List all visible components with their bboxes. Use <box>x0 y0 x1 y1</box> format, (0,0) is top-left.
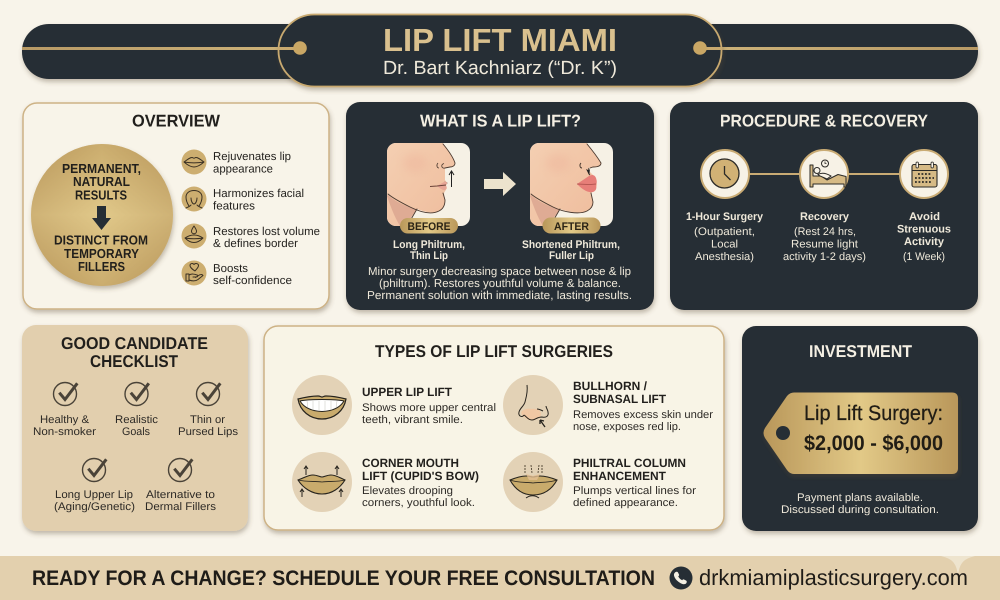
type: bullhorn lift: SUBNASAL LIFT <box>573 392 667 406</box>
type: philtral column <box>503 452 696 512</box>
panel: types of surgeries <box>264 326 724 530</box>
benefit: restores: & defines border <box>213 238 298 250</box>
price tag: Lip Lift Surgery: <box>804 402 943 425</box>
panel: overview <box>23 103 329 309</box>
before caption <box>393 239 465 262</box>
panel: candidate checklist <box>22 325 248 531</box>
type: philtral column: defined appearance. <box>573 497 678 509</box>
payment note: Discussed during consultation. <box>781 504 939 516</box>
description: Minor surgery decreasing space between nose & lip <box>368 266 631 278</box>
step: recovery: Resume light <box>791 238 858 250</box>
type: bullhorn lift <box>503 375 713 435</box>
types heading: TYPES OF LIP LIFT SURGERIES <box>375 342 613 361</box>
after caption: Fuller Lip <box>549 250 594 262</box>
type: philtral column: ENHANCEMENT <box>573 469 667 483</box>
before badge: BEFORE <box>408 221 450 233</box>
type: corner mouth lift: LIFT (CUPID'S BOW) <box>362 469 479 483</box>
type: bullhorn lift: nose, exposes red lip. <box>573 421 681 433</box>
check: filler alternative <box>145 458 217 513</box>
check: healthy <box>33 382 96 438</box>
step: surgery: 1-Hour Surgery <box>686 211 764 223</box>
step: avoid activity: (1 Week) <box>903 251 945 263</box>
what heading: WHAT IS A LIP LIFT? <box>420 112 581 130</box>
header banner <box>22 14 978 86</box>
gold seal: RESULTS <box>75 188 127 202</box>
check: long upper lip <box>54 458 135 513</box>
checklist heading <box>61 334 208 371</box>
procedure heading: PROCEDURE & RECOVERY <box>720 112 929 130</box>
checklist heading: GOOD CANDIDATE <box>61 334 208 353</box>
gold seal: FILLERS <box>78 259 125 274</box>
overview heading: OVERVIEW <box>132 112 221 130</box>
benefit: confidence: Boosts <box>213 263 248 275</box>
type: bullhorn lift: BULLHORN / <box>573 379 648 393</box>
check: realistic: Realistic <box>115 414 159 426</box>
check: thin lips: Pursed Lips <box>178 426 239 438</box>
check: healthy: Healthy & <box>40 414 90 426</box>
benefit: rejuvenates <box>182 150 291 176</box>
icon: bed <box>800 150 848 198</box>
step: recovery: activity 1-2 days) <box>783 251 866 263</box>
type: upper lip lift: Shows more upper central <box>362 402 496 414</box>
footer call to action <box>0 537 1000 600</box>
sparkle <box>941 537 975 575</box>
benefit: harmonizes: features <box>213 200 255 212</box>
panel: what is a lip lift <box>346 102 654 310</box>
check: filler alternative: Alternative to <box>146 489 215 501</box>
after badge <box>542 218 600 234</box>
check: healthy: Non-smoker <box>33 426 96 438</box>
panel: procedure and recovery <box>670 102 978 310</box>
type: corner mouth lift: corners, youthful look. <box>362 497 475 509</box>
payment note: Payment plans available. <box>797 492 923 504</box>
check: long upper lip: (Aging/Genetic) <box>54 501 135 513</box>
step: surgery: (Outpatient, <box>694 226 755 238</box>
before illustration <box>387 143 470 226</box>
benefit: confidence: self-confidence <box>213 275 292 287</box>
subtitle: Dr. Bart Kachniarz (“Dr. K”) <box>383 58 617 79</box>
step: avoid activity: Strenuous <box>897 224 951 236</box>
benefit: confidence <box>182 260 292 287</box>
step: surgery <box>686 211 764 263</box>
description: Permanent solution with immediate, lasting results. <box>367 290 632 302</box>
check: filler alternative: Dermal Fillers <box>145 501 217 513</box>
step: recovery: Recovery <box>800 211 850 223</box>
step: avoid activity <box>897 211 951 263</box>
gold seal: DISTINCT FROM <box>54 232 148 248</box>
benefit: rejuvenates: Rejuvenates lip <box>213 151 291 163</box>
type: upper lip lift: UPPER LIP LIFT <box>362 385 453 399</box>
icon: calendar <box>900 150 948 198</box>
description <box>367 266 632 302</box>
before caption: Thin Lip <box>410 250 448 262</box>
before caption: Long Philtrum, <box>393 239 465 251</box>
title: LIP LIFT MIAMI <box>383 22 617 58</box>
check: long upper lip: Long Upper Lip <box>55 489 133 501</box>
gold seal: TEMPORARY <box>64 246 139 261</box>
after caption <box>522 239 620 262</box>
type: philtral column: Plumps vertical lines for <box>573 485 696 497</box>
after badge: AFTER <box>554 221 589 233</box>
payment note <box>781 492 939 516</box>
benefit: harmonizes <box>182 186 304 212</box>
benefit: restores <box>182 224 320 250</box>
panel: investment <box>742 326 978 531</box>
check: realistic <box>115 382 159 438</box>
step: avoid activity: Activity <box>904 236 945 248</box>
step: avoid activity: Avoid <box>909 211 940 223</box>
gold seal: NATURAL <box>73 174 130 189</box>
benefit: restores: Restores lost volume <box>213 226 320 238</box>
price tag: $2,000 - $6,000 <box>804 432 943 455</box>
after illustration <box>530 143 613 226</box>
step: recovery: (Rest 24 hrs, <box>794 226 856 238</box>
investment heading: INVESTMENT <box>809 342 913 361</box>
benefit: rejuvenates: appearance <box>213 164 273 176</box>
benefit: harmonizes: Harmonizes facial <box>213 188 304 200</box>
check: thin lips <box>178 382 239 438</box>
transition arrow <box>484 172 516 196</box>
type: philtral column: PHILTRAL COLUMN <box>573 456 686 470</box>
type: corner mouth lift <box>292 452 479 512</box>
after caption: Shortened Philtrum, <box>522 239 620 251</box>
check: realistic: Goals <box>122 426 150 438</box>
website: drkmiamiplasticsurgery.com <box>699 565 968 590</box>
step: recovery <box>783 211 866 263</box>
check: thin lips: Thin or <box>190 414 225 426</box>
call to action text: READY FOR A CHANGE? SCHEDULE YOUR FREE CONSULTATION <box>32 567 655 590</box>
step: surgery: Local <box>711 238 738 250</box>
price tag <box>764 392 958 474</box>
description: (philtrum). Restores youthful volume & balance. <box>379 278 621 290</box>
checklist heading: CHECKLIST <box>90 352 179 371</box>
type: corner mouth lift: CORNER MOUTH <box>362 456 459 470</box>
type: upper lip lift <box>292 375 496 435</box>
gold seal: PERMANENT, <box>62 161 141 176</box>
icon: clock <box>701 150 749 198</box>
before badge <box>400 218 458 234</box>
type: corner mouth lift: Elevates drooping <box>362 485 453 497</box>
step: surgery: Anesthesia) <box>695 251 754 263</box>
icon: phone <box>670 566 692 590</box>
type: upper lip lift: teeth, vibrant smile. <box>362 414 463 426</box>
gold seal <box>31 144 173 286</box>
type: bullhorn lift: Removes excess skin under <box>573 409 713 421</box>
